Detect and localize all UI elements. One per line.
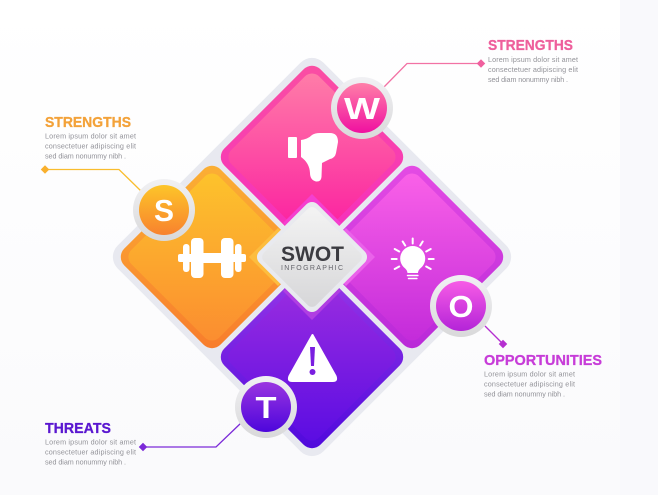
connector: S (41, 165, 142, 192)
text block: opportunities: consectetuer adipiscing elit (484, 380, 575, 388)
panel: opportunities diamond (316, 161, 508, 353)
badge: T: T (256, 390, 277, 425)
text block: threats: consectetuer adipiscing elit (45, 448, 136, 456)
subtitle: INFOGRAPHIC: INFOGRAPHIC (281, 265, 343, 272)
text block: left strengths: STRENGTHS (45, 114, 131, 131)
text block: top right strengths: STRENGTHS (488, 37, 573, 54)
badge: S: S (154, 193, 174, 228)
text block: top right strengths: sed diam nonummy nibh . (488, 75, 568, 84)
connector: O (485, 326, 507, 348)
text block: threats: Lorem ipsum dolor sit amet (45, 438, 136, 446)
text block: opportunities: sed diam nonummy nibh . (484, 390, 565, 398)
connector: W (384, 59, 485, 87)
badge: O: O (448, 289, 474, 324)
icon: thumbs down (288, 133, 338, 182)
text block: top right strengths: Lorem ipsum dolor sit amet (488, 55, 578, 64)
connector: T (139, 423, 241, 451)
text block: left strengths: consectetuer adipiscing elit (45, 142, 136, 150)
text block: left strengths (45, 114, 136, 160)
text block: threats: THREATS (45, 420, 111, 437)
text block: threats (45, 420, 136, 466)
text block: top right strengths: consectetuer adipiscing elit (488, 65, 578, 74)
outer grey diamond frame (106, 51, 518, 463)
text block: opportunities: Lorem ipsum dolor sit amet (484, 370, 575, 378)
panel: strengths diamond (116, 161, 308, 353)
title: SWOT: SWOT (281, 243, 344, 266)
icon: light bulb (392, 238, 434, 278)
badge: O (430, 275, 492, 337)
badge: W: W (344, 91, 381, 126)
center SWOT diamond (254, 199, 370, 315)
icon: dumbbell (178, 238, 246, 278)
badge: W (331, 77, 393, 139)
text block: opportunities: OPPORTUNITIES (484, 352, 602, 369)
text block: threats: sed diam nonummy nibh . (45, 458, 126, 466)
text block: opportunities (484, 352, 602, 398)
badge: T (235, 376, 297, 438)
panel: weaknesses diamond (216, 61, 408, 253)
icon: warning triangle (289, 335, 336, 381)
text block: left strengths: sed diam nonummy nibh . (45, 152, 126, 160)
text block: top right strengths (488, 37, 578, 84)
badge: S (133, 179, 195, 241)
text block: left strengths: Lorem ipsum dolor sit amet (45, 132, 136, 140)
panel: threats diamond (216, 261, 408, 453)
